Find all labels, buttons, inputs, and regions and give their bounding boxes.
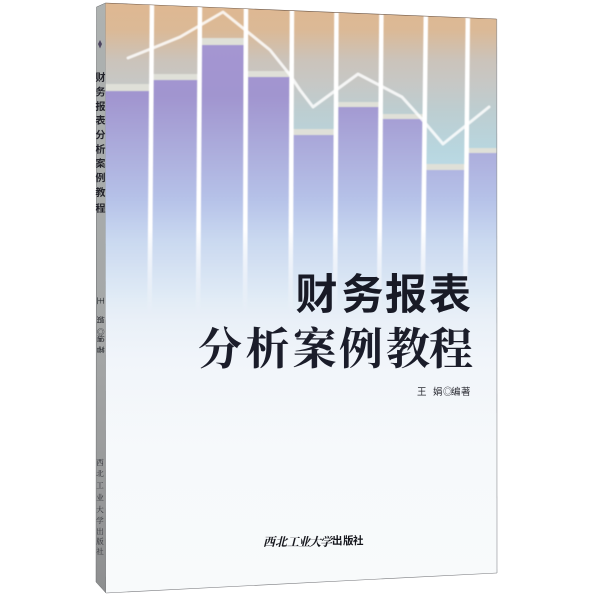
spine author: 王娟◎编著 bbox=[96, 297, 106, 354]
title line 2: 分析案例教程 bbox=[198, 325, 473, 374]
spine title: 教 bbox=[96, 186, 106, 199]
author: 王娟◎编著 bbox=[417, 386, 471, 398]
spine publisher: 北 bbox=[96, 468, 104, 478]
spine publisher: 版 bbox=[96, 536, 104, 546]
spine panel bbox=[96, 3, 106, 593]
spine publisher: 业 bbox=[96, 492, 104, 502]
spine publisher: 大 bbox=[96, 504, 104, 514]
bar gaps bbox=[150, 0, 468, 320]
spine title: 程 bbox=[96, 202, 106, 215]
publisher suffix: 出版社 bbox=[332, 534, 364, 547]
front cover bbox=[100, 0, 500, 600]
title line 1: 财务报表 bbox=[296, 271, 471, 318]
trend line bbox=[128, 12, 489, 144]
spine publisher: 学 bbox=[96, 515, 104, 525]
spine publisher: 社 bbox=[96, 546, 104, 556]
bar chart bbox=[105, 0, 498, 320]
bar caps bbox=[105, 38, 498, 171]
spine publisher: 西 bbox=[96, 458, 104, 467]
cover background bbox=[100, 0, 500, 600]
bars bbox=[105, 45, 498, 320]
spine title: 务 bbox=[96, 86, 106, 98]
bottom edge bbox=[106, 573, 497, 593]
spine title: 表 bbox=[96, 114, 106, 127]
publisher bbox=[264, 535, 364, 548]
right edge bbox=[496, 19, 498, 573]
spine title: 例 bbox=[96, 172, 106, 184]
spine title: 案 bbox=[96, 157, 106, 170]
book spine bbox=[96, 3, 106, 593]
top edge bbox=[106, 3, 496, 19]
spine title: 析 bbox=[96, 143, 106, 156]
spine publisher: 出 bbox=[96, 526, 104, 536]
spine title: 财 bbox=[96, 71, 106, 84]
publisher calligraphy name: 西北工业大学 bbox=[263, 535, 334, 549]
book edges bbox=[106, 3, 497, 593]
spine title: 报 bbox=[96, 100, 106, 113]
icon: publisher logo bbox=[98, 40, 102, 48]
spine title: 分 bbox=[96, 128, 106, 142]
spine publisher: 工 bbox=[96, 481, 104, 490]
